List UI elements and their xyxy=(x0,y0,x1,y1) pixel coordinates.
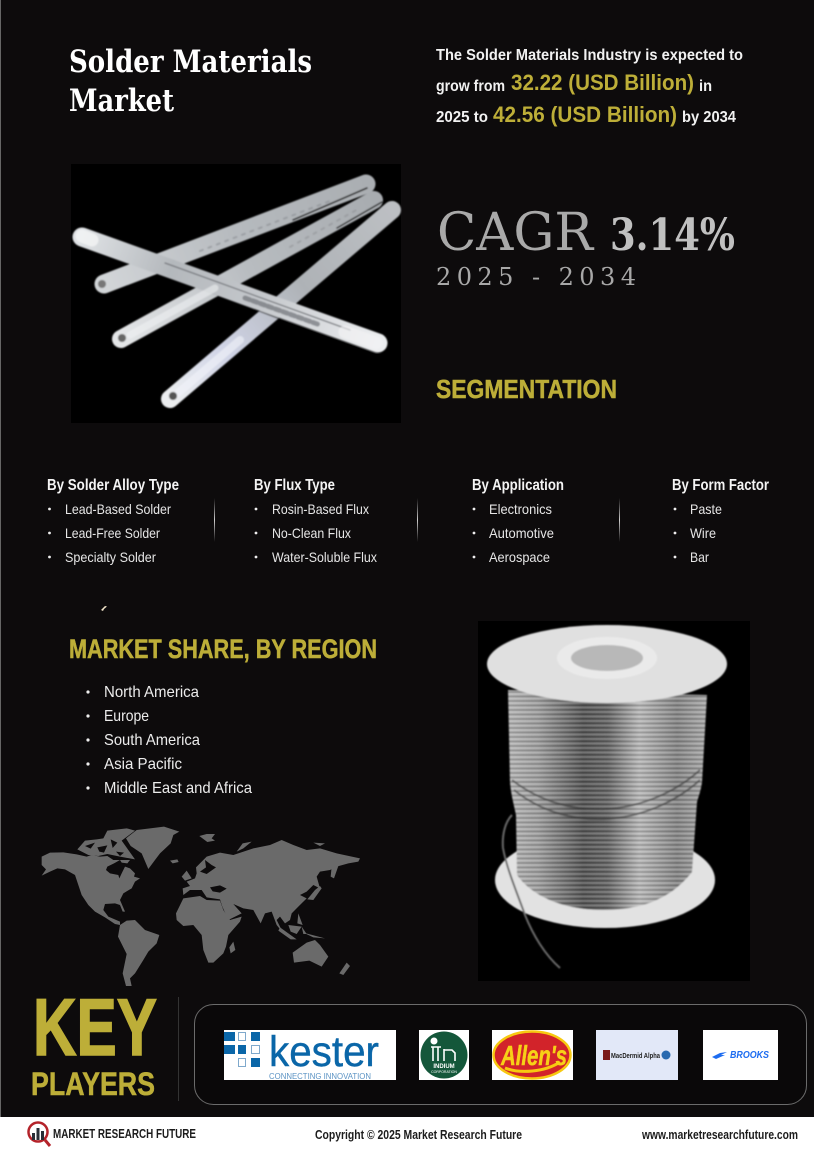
market growth statement: 42.56 (USD Billion) xyxy=(493,102,677,127)
segment: by form factor xyxy=(672,477,769,565)
logo: indium: INDIUM xyxy=(433,1064,455,1070)
segment: by solder alloy type: Specialty Solder xyxy=(65,549,156,565)
region list: Middle East and Africa xyxy=(104,780,252,797)
key players label: KEY xyxy=(33,983,157,1073)
logo: kester: CONNECTING INNOVATION xyxy=(269,1072,371,1081)
footer brand name: MARKET RESEARCH FUTURE xyxy=(53,1126,196,1141)
key players label xyxy=(31,983,157,1102)
segment: by form factor: Wire xyxy=(690,525,716,541)
segment: by solder alloy type: Lead-Based Solder xyxy=(65,501,171,517)
segment: by flux type xyxy=(254,477,377,565)
segment: by solder alloy type xyxy=(47,477,179,565)
logo: kester: kester xyxy=(269,1028,379,1076)
key players label: PLAYERS xyxy=(31,1066,155,1102)
region list: North America xyxy=(104,684,199,701)
market growth statement: in xyxy=(699,78,712,95)
CAGR figure: CAGR xyxy=(437,203,595,263)
photo: solder wire spool xyxy=(478,621,750,981)
segment: by application: Automotive xyxy=(489,525,554,541)
title: Market xyxy=(69,83,175,119)
market growth statement xyxy=(436,47,743,127)
segment: by form factor: By Form Factor xyxy=(672,477,769,494)
segment: by flux type: Rosin-Based Flux xyxy=(272,501,369,517)
logo: allen's: Allen's xyxy=(500,1040,567,1071)
segment: by flux type: Water-Soluble Flux xyxy=(272,549,377,565)
region list: Europe xyxy=(104,708,149,725)
logo: kester xyxy=(224,1028,396,1081)
segment: by form factor: Bar xyxy=(690,549,709,565)
market growth statement: 2025 to xyxy=(436,109,488,126)
logo: brooks xyxy=(703,1030,778,1080)
CAGR figure: 3.14% xyxy=(610,210,735,261)
photo: solder bars xyxy=(71,164,401,423)
copyright: Copyright © 2025 Market Research Future xyxy=(315,1127,522,1142)
segment: by form factor: Paste xyxy=(690,501,722,517)
region list: Asia Pacific xyxy=(104,756,182,773)
CAGR figure xyxy=(436,203,735,291)
market growth statement: The Solder Materials Industry is expected to xyxy=(436,47,743,64)
logo: macdermid alpha xyxy=(596,1030,678,1080)
logo: macdermid alpha: MacDermid Alpha xyxy=(611,1053,660,1060)
market share heading: MARKET SHARE, BY REGION xyxy=(69,634,377,664)
logo: brooks: BROOKS xyxy=(730,1050,769,1061)
key players panel xyxy=(194,1004,806,1104)
footer logo icon xyxy=(28,1122,50,1146)
segment: by flux type: No-Clean Flux xyxy=(272,525,351,541)
market growth statement: grow from xyxy=(436,78,505,95)
logo: allen's xyxy=(492,1030,573,1080)
segment: by solder alloy type: Lead-Free Solder xyxy=(65,525,160,541)
segment: by application: By Application xyxy=(472,477,564,494)
segment: by application: Electronics xyxy=(489,501,552,517)
segment: by application xyxy=(472,477,564,565)
market growth statement: by 2034 xyxy=(682,109,736,126)
segmentation heading: SEGMENTATION xyxy=(436,374,617,404)
logo: indium: CORPORATION xyxy=(431,1070,457,1074)
market growth statement: 32.22 (USD Billion) xyxy=(511,70,694,95)
CAGR figure: 2025 - 2034 xyxy=(436,263,636,291)
logo: indium xyxy=(419,1030,469,1080)
title: Solder Materials xyxy=(69,44,312,80)
segment: by application: Aerospace xyxy=(489,549,550,565)
footer xyxy=(0,1117,814,1150)
world map xyxy=(42,827,360,986)
region list xyxy=(86,684,252,797)
segment: by flux type: By Flux Type xyxy=(254,477,335,494)
segment: by solder alloy type: By Solder Alloy Type xyxy=(47,477,179,494)
title xyxy=(69,44,312,119)
region list: South America xyxy=(104,732,200,749)
